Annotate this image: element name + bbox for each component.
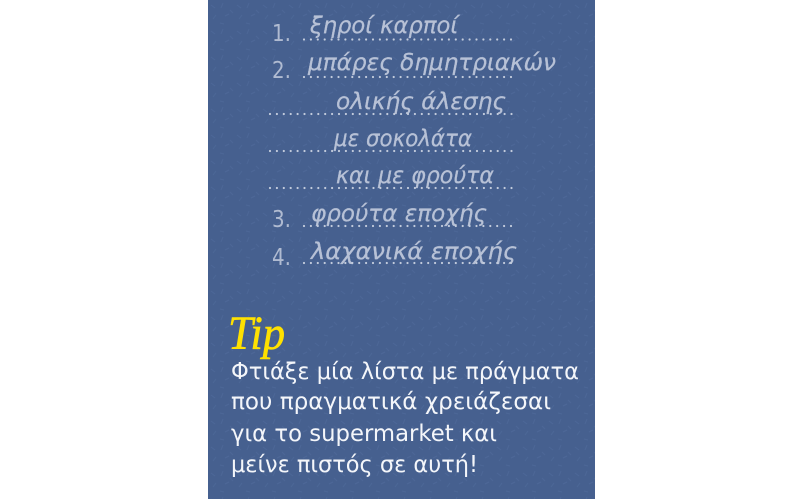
tip text — [231, 359, 579, 478]
list item 1: 1. — [272, 21, 291, 47]
list item 2 — [270, 48, 556, 189]
list item 3 — [272, 199, 512, 233]
list item 2: μπάρες δημητριακών — [307, 48, 556, 76]
list item 2: ολικής άλεσης — [336, 87, 506, 115]
tip text: μείνε πιστός σε αυτή! — [231, 452, 478, 478]
heading: Tip: Tip — [228, 307, 285, 360]
list item 3: φρούτα εποχής — [311, 199, 487, 227]
list item 4: 4. — [272, 245, 291, 271]
panel: blue background — [208, 0, 595, 499]
list item 1: ξηροί καρποί — [309, 11, 461, 39]
list item 2: και με φρούτα — [336, 161, 494, 189]
list item 2: 2. — [272, 58, 291, 84]
tip text: που πραγματικά χρειάζεσαι — [231, 389, 551, 415]
tip text: Φτιάξε μία λίστα με πράγματα — [231, 359, 579, 385]
list item 2: με σοκολάτα — [333, 124, 472, 152]
shopping list — [270, 11, 556, 271]
list item 4 — [272, 237, 517, 271]
list item 3: 3. — [272, 207, 291, 233]
list item 4: λαχανικά εποχής — [309, 237, 517, 265]
tip text: για το supermarket και — [231, 421, 497, 447]
list item 1 — [272, 11, 512, 47]
